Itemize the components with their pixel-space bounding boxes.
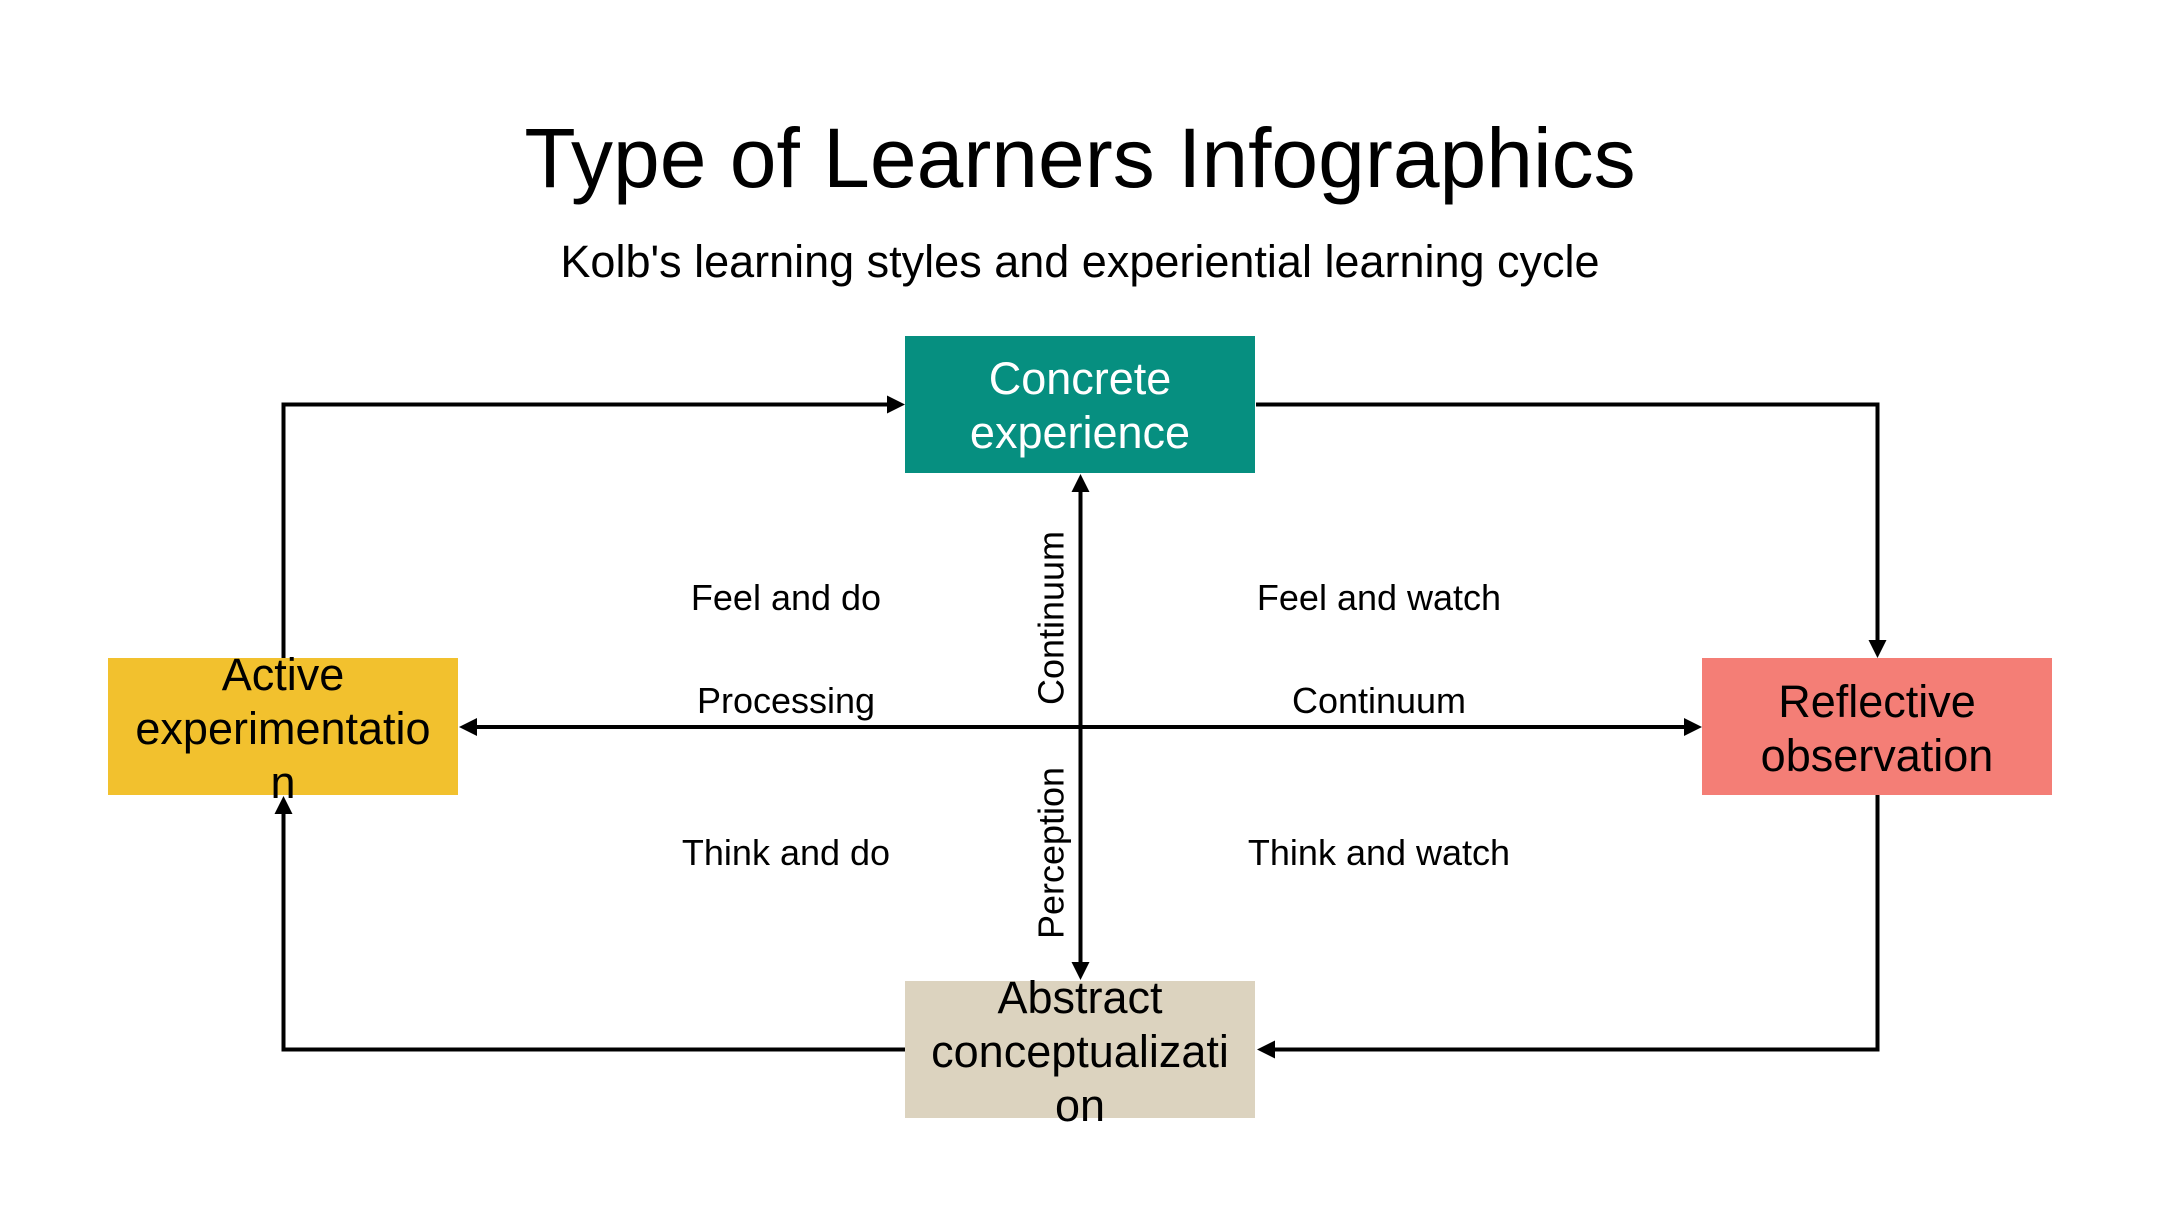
- label: processing: Processing: [697, 680, 875, 721]
- box: abstract conceptualization: Abstract: [997, 972, 1163, 1023]
- box: abstract conceptualization: conceptualizati: [931, 1026, 1229, 1077]
- label: think and do: Think and do: [682, 832, 890, 873]
- arrow: vertical perception axis: [1072, 474, 1090, 980]
- box: active experimentation: [108, 649, 458, 808]
- box: active experimentation: n: [270, 757, 296, 808]
- box: concrete experience: experience: [970, 407, 1190, 458]
- label: horizontal continuum: Continuum: [1292, 680, 1466, 721]
- arrow: horizontal processing axis: [459, 718, 1702, 736]
- box: reflective observation: Reflective: [1778, 676, 1976, 727]
- arrow: abstract conceptualization to active experimentation: [274, 796, 905, 1050]
- box: concrete experience: [905, 336, 1255, 473]
- box: reflective observation: observation: [1761, 730, 1993, 781]
- label: think and watch: Think and watch: [1248, 832, 1510, 873]
- box: abstract conceptualization: [905, 972, 1255, 1131]
- subtitle: Kolb's learning styles and experiential learning cycle: [560, 236, 1600, 287]
- arrow: active experimentation to concrete experience: [284, 396, 905, 658]
- label: vertical continuum: Continuum: [1030, 531, 1072, 705]
- arrow: concrete experience to reflective observation: [1256, 404, 1886, 658]
- label: feel and do: Feel and do: [691, 577, 881, 618]
- box: abstract conceptualization: on: [1055, 1080, 1105, 1131]
- title: Type of Learners Infographics: [524, 111, 1636, 205]
- box: active experimentation: Active: [222, 649, 344, 700]
- box: concrete experience: Concrete: [989, 353, 1171, 404]
- label: feel and watch: Feel and watch: [1257, 577, 1501, 618]
- label: perception: Perception: [1030, 767, 1072, 939]
- box: active experimentation: experimentatio: [135, 703, 431, 754]
- arrow: reflective observation to abstract conceptualization: [1257, 795, 1878, 1058]
- box: reflective observation: [1702, 658, 2052, 795]
